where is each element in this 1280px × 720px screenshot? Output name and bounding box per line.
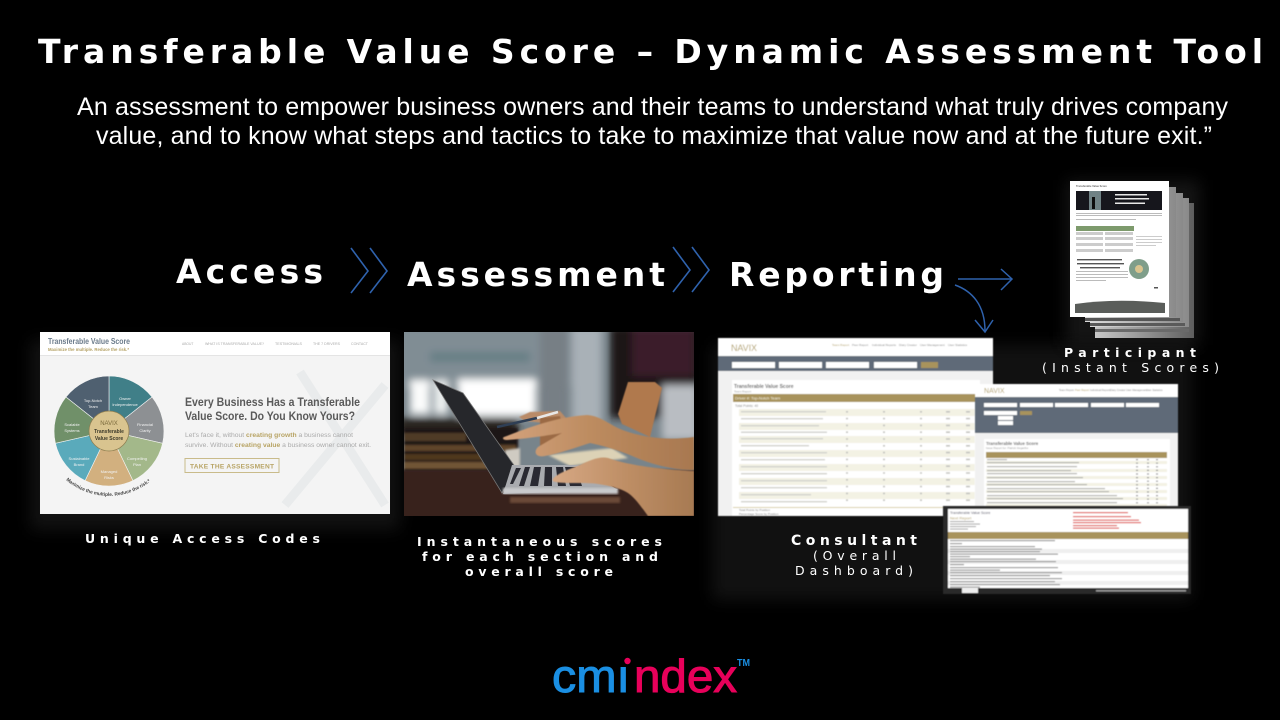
dashboard nav: [832, 343, 968, 347]
value wheel: [54, 376, 164, 497]
panel: consultant dashboard screenshot: Percentage Score by Position: [739, 512, 779, 516]
individual nav: Peer Report: [1075, 388, 1089, 392]
subtitle text block: value, and to know what steps and tactics to take to maximize that value now and at the future exit.”: [96, 122, 1212, 150]
dashboard nav: Team Report: [832, 343, 849, 347]
title: Transferable Value Score – Dynamic Assessment Tool: [38, 32, 1263, 71]
value wheel: Compelling: [127, 456, 147, 461]
site paragraph: [185, 432, 371, 449]
site navigation: ABOUT: [182, 342, 193, 346]
dashboard nav: User Statistics: [948, 343, 968, 347]
value wheel: NAVIX: [100, 421, 118, 427]
panel: consultant dashboard screenshot: [718, 338, 993, 516]
site navigation: THE 7 DRIVERS: [313, 342, 341, 346]
caption: consultant: (Overall: [813, 548, 896, 563]
logo: cmindex: ndex: [634, 650, 737, 702]
value wheel: Financial: [137, 422, 153, 427]
value wheel: Clarity: [139, 428, 151, 433]
panel: spreadsheet export screenshot: Transferable Value Score: [950, 511, 990, 515]
individual nav: User Statistics: [1146, 388, 1163, 392]
panel: spreadsheet export screenshot: [943, 506, 1191, 594]
value wheel: Owner: [119, 396, 132, 401]
logo: cmindex: [552, 650, 750, 702]
caption: consultant: Consultant: [791, 533, 917, 549]
arrow: to consultant: [955, 285, 993, 332]
table: [400, 470, 698, 520]
individual nav: User Management: [1126, 388, 1148, 392]
panel: assessment photo of laptop: [398, 326, 700, 520]
value wheel: Independence: [112, 402, 138, 407]
pen: [497, 412, 558, 427]
logo: cmindex: cmı: [552, 650, 630, 702]
panel: access screenshot: [30, 332, 400, 530]
value wheel: Sustainable: [69, 456, 90, 461]
value wheel: Managed: [101, 469, 117, 474]
site headline: [185, 397, 360, 420]
report title: Transferable Value Score: [734, 384, 794, 390]
value wheel: Risks: [104, 475, 114, 480]
value wheel: Top-Notch: [84, 398, 102, 403]
caption: consultant: [791, 533, 917, 578]
site headline: Value Score. Do You Know Yours?: [185, 409, 355, 423]
subtitle text block: An assessment to empower business owners and their teams to understand what truly drives company: [77, 93, 1228, 121]
site paragraph: survive. Without creating value a business owner cannot exit.: [185, 442, 371, 449]
value wheel: Value Score: [95, 436, 123, 442]
value wheel: Scalable: [64, 422, 80, 427]
red notes: [1073, 512, 1141, 529]
site logo: Transferable Value Score: [48, 337, 130, 346]
caption: unique access codes: Unique Access Codes: [85, 531, 320, 546]
caption: instantaneous scores: for each section and: [422, 549, 658, 564]
heading: Reporting: Reporting: [729, 255, 944, 294]
value wheel: Brand: [74, 462, 84, 467]
panel: consultant dashboard screenshot: Total Points by Position: [739, 508, 770, 512]
caption: instantaneous scores: [417, 534, 662, 579]
panel: spreadsheet export screenshot: Next Report: [950, 516, 972, 520]
value wheel: Plan: [133, 462, 141, 467]
dashboard rows: [739, 409, 975, 503]
dashboard nav: Peer Report: [852, 343, 868, 347]
caption: instantaneous scores: overall score: [465, 564, 613, 579]
logo: cmindex: TM: [737, 658, 750, 669]
caption: participant: [1042, 345, 1219, 375]
site button: TAKE THE ASSESSMENT: [190, 464, 274, 470]
dashboard nav: Individual Reports: [872, 343, 897, 347]
panel: individual report screenshot: Transferable Value Score: [986, 441, 1039, 446]
site logo: [48, 337, 130, 352]
caption: consultant: Dashboard): [795, 563, 913, 578]
hands and arms: [503, 382, 694, 516]
laptop: [433, 380, 618, 494]
glow behind reports: [712, 345, 1192, 600]
site navigation: WHAT IS TRANSFERABLE VALUE?: [205, 342, 264, 346]
individual nav: Individual Reports: [1090, 388, 1111, 392]
front report page: Transferable Value Score: [1076, 184, 1107, 188]
panel: individual report screenshot: [975, 384, 1178, 508]
site logo: Maximize the multiple. Reduce the risk.*: [48, 347, 129, 352]
panel: consultant dashboard screenshot: Total Points: 40: [735, 404, 758, 408]
subtitle text block: [77, 93, 1228, 150]
panel: individual report screenshot: Issue Report for: Patrick Hegarthe: [986, 446, 1029, 450]
individual nav: Diary Creator: [1110, 388, 1126, 392]
stacked pages: [1080, 187, 1194, 338]
arrow: chevrons Assessment to Reporting: [673, 247, 709, 292]
front report page: [1070, 181, 1169, 317]
dashboard nav: User Management: [920, 343, 945, 347]
panel: consultant dashboard screenshot: Driver #: Top-Notch Team: [735, 396, 781, 400]
caption: participant: (Instant Scores): [1042, 360, 1219, 375]
site paragraph: Let's face it, without creating growth a business cannot: [185, 432, 353, 439]
heading: Assessment: Assessment: [407, 255, 665, 294]
arrow: to participant: [958, 269, 1012, 290]
caption: instantaneous scores: Instantaneous scores: [417, 534, 662, 549]
value wheel: Maximize the multiple. Reduce the risk.*: [66, 478, 150, 497]
arrow: chevrons Access to Assessment: [351, 248, 387, 293]
individual rows: [986, 459, 1167, 507]
spreadsheet rows: [948, 540, 1188, 588]
navix logo small: NAVIX: [984, 388, 1005, 395]
caption: participant: Participant: [1064, 345, 1196, 360]
site navigation: TESTIMONIALS: [275, 342, 303, 346]
panel: consultant dashboard screenshot: Team Report: [734, 390, 751, 394]
site headline: Every Business Has a Transferable: [185, 395, 360, 409]
individual nav: [1059, 388, 1163, 392]
value wheel: Team: [88, 404, 99, 409]
site button: [185, 458, 279, 472]
value wheel: Systems: [64, 428, 80, 433]
site navigation: CONTACT: [351, 342, 368, 346]
books: [404, 428, 518, 472]
site navigation: [182, 342, 368, 345]
dashboard nav: Diary Creator: [899, 343, 917, 347]
navix logo: NAVIX: [731, 343, 757, 353]
spreadsheet meta: [950, 521, 980, 530]
value wheel: Transferable: [94, 429, 124, 435]
panel: participant report stack: [1066, 180, 1200, 345]
individual nav: Team Report: [1059, 388, 1074, 392]
heading: Access: Access: [176, 252, 323, 291]
